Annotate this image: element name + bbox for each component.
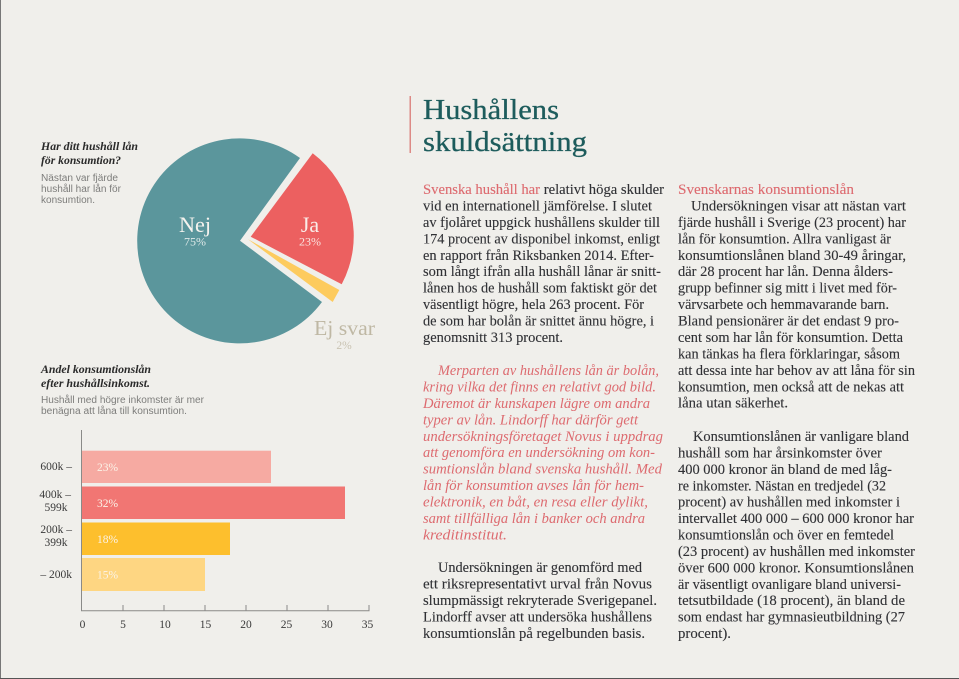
y axis labels: 400k – bbox=[39, 489, 71, 501]
y axis labels: 600k – bbox=[40, 461, 72, 473]
text block: income paragraph: som endast har gymnasieutbildning (27 bbox=[678, 610, 905, 626]
bar: 400k-599k 32% bbox=[82, 486, 345, 519]
text block: italic highlighted paragraph: elektronik, en båt, en resa eller dylikt, bbox=[423, 494, 648, 510]
x axis labels: 35 bbox=[362, 619, 374, 631]
heading: bar chart question: Andel konsumtionslån bbox=[40, 362, 151, 376]
text block: italic highlighted paragraph: Däremot är kunskapen lägre om andra bbox=[422, 396, 650, 412]
y axis labels: 599k bbox=[44, 502, 68, 514]
text block: income paragraph bbox=[678, 429, 915, 642]
text block: method paragraph: konsumtionslån på regelbunden basis. bbox=[423, 626, 645, 642]
text block: intro paragraph: 174 procent av disponibel inkomst, enligt bbox=[423, 231, 660, 247]
x axis labels: 20 bbox=[240, 619, 252, 631]
heading: bar chart question bbox=[40, 362, 151, 390]
x axis labels: 5 bbox=[120, 619, 126, 631]
text block: income paragraph: 400 000 kronor än bland de med låg- bbox=[678, 462, 892, 478]
bar: 400k-599k 32%: 32% bbox=[97, 498, 118, 510]
x axis labels: 15 bbox=[200, 619, 212, 631]
text block: method paragraph: Lindorff avser att undersöka hushållens bbox=[423, 609, 652, 625]
bar: 200k-399k 18%: 18% bbox=[97, 534, 118, 546]
text block: Svenskarnas konsumtionslån: Undersökningen visar att nästan vart bbox=[691, 198, 906, 214]
x axis labels: 0 bbox=[80, 619, 86, 631]
label: Ej svar: 2% bbox=[336, 340, 352, 352]
label: Ej svar: Ej svar bbox=[314, 316, 375, 340]
text block: italic highlighted paragraph: sumtionslån bland svenska hushåll. Med bbox=[423, 462, 663, 478]
text block: intro paragraph bbox=[423, 182, 664, 346]
text block: intro paragraph: genomsnitt 313 procent. bbox=[423, 330, 563, 346]
label: Nej: Nej bbox=[179, 212, 211, 237]
text block: italic highlighted paragraph bbox=[422, 363, 663, 543]
text block: income paragraph: procent) av hushållen med inkomster i bbox=[678, 495, 900, 511]
text block: Svenskarnas konsumtionslån: lån för konsumtion. Allra vanligast är bbox=[678, 231, 891, 247]
text block: Svenskarnas konsumtionslån: Svenskarnas konsumtionslån bbox=[678, 182, 855, 198]
text block: Svenskarnas konsumtionslån: fjärde hushåll i Sverige (23 procent) har bbox=[678, 215, 906, 231]
text block: Svenskarnas konsumtionslån: att dessa inte har behov av att låna för sin bbox=[678, 363, 916, 379]
x axis labels: 25 bbox=[281, 619, 292, 631]
label: Nej bbox=[179, 212, 211, 248]
title: Hushållens bbox=[423, 94, 559, 126]
axes bbox=[82, 430, 370, 611]
text block: Svenskarnas konsumtionslån: grupp befinner sig mitt i livet med för- bbox=[678, 281, 897, 297]
text block: income paragraph: (23 procent) av hushållen med inkomster bbox=[678, 544, 915, 560]
bar: under 200k 15%: 15% bbox=[97, 570, 118, 582]
text block: intro paragraph: som långt ifrån alla hushåll lånar är snitt- bbox=[423, 264, 661, 280]
x axis labels: 10 bbox=[159, 619, 171, 631]
pie chart bbox=[137, 138, 375, 352]
heading: pie chart question: Har ditt hushåll lån bbox=[40, 139, 138, 153]
text block: pie chart description: konsumtion. bbox=[41, 195, 95, 206]
text block: method paragraph: Undersökningen är genomförd med bbox=[438, 560, 643, 576]
text block: italic highlighted paragraph: kreditinstitut. bbox=[423, 527, 507, 543]
text block: Svenskarnas konsumtionslån: låna utan säkerhet. bbox=[678, 396, 788, 412]
text block: income paragraph: är väsentligt ovanligare bland universi- bbox=[678, 577, 901, 593]
x axis labels bbox=[80, 619, 374, 631]
text block: italic highlighted paragraph: typer av lån. Lindorff har därför gett bbox=[423, 412, 639, 428]
title bbox=[410, 94, 587, 158]
text block: italic highlighted paragraph: kring vilka det finns en relativt god bild. bbox=[423, 379, 656, 395]
text block: bar chart description: Hushåll med högre inkomster är mer bbox=[41, 394, 205, 406]
text block: Svenskarnas konsumtionslån bbox=[678, 182, 916, 412]
text block: Svenskarnas konsumtionslån: kan tänkas ha flera förklaringar, såsom bbox=[678, 346, 901, 362]
heading: pie chart question bbox=[40, 139, 138, 167]
text block: intro paragraph: av fjolåret uppgick hushållens skulder till bbox=[423, 215, 660, 231]
bar: 600k 23% bbox=[82, 451, 271, 483]
text block: bar chart description bbox=[41, 394, 205, 417]
text block: pie chart description: Nästan var fjärde bbox=[41, 173, 118, 184]
bar: 200k-399k 18% bbox=[82, 522, 230, 555]
bar: under 200k 15% bbox=[82, 558, 205, 591]
text block: italic highlighted paragraph: lån för konsumtion avses lån för hem- bbox=[423, 478, 644, 494]
text block: italic highlighted paragraph: att genomföra en undersökning om kon- bbox=[423, 445, 655, 461]
text block: income paragraph: konsumtionslån och över en femtedel bbox=[678, 528, 894, 544]
text block: Svenskarnas konsumtionslån: värvsarbete och hemmavarande barn. bbox=[678, 297, 889, 313]
label: Ja: 23% bbox=[299, 234, 321, 248]
text block: intro paragraph: väsentligt högre, hela 263 procent. För bbox=[423, 297, 644, 313]
text block: pie chart description bbox=[41, 173, 122, 206]
text block: income paragraph: tetsutbildade (18 procent), än bland de bbox=[678, 593, 905, 609]
x axis labels: 30 bbox=[321, 619, 333, 631]
text block: income paragraph: hushåll som har årsinkomster över bbox=[678, 445, 882, 461]
label: Ej svar bbox=[314, 316, 375, 352]
text block: income paragraph: re inkomster. Nästan en tredjedel (32 bbox=[678, 478, 886, 494]
title: skuldsättning bbox=[423, 126, 587, 158]
text block: intro paragraph: de som har bolån är snittet ännu högre, i bbox=[423, 314, 654, 330]
pie slice: Nej 75% bbox=[137, 138, 322, 343]
text block: intro paragraph: lånen hos de hushåll som faktiskt gör det bbox=[423, 281, 657, 297]
bar chart bbox=[39, 430, 374, 631]
text block: method paragraph: ett riksrepresentativt urval från Novus bbox=[423, 576, 652, 592]
pie slice: Ej svar 2% bbox=[248, 239, 339, 302]
heading: bar chart question: efter hushållsinkomst. bbox=[41, 376, 150, 390]
text block: pie chart description: hushåll har lån för bbox=[41, 183, 122, 195]
text block: method paragraph: slumpmässigt rekryterade Sverigepanel. bbox=[423, 593, 657, 609]
text block: income paragraph: intervallet 400 000 – 600 000 kronor har bbox=[678, 511, 914, 527]
heading: pie chart question: för konsumtion? bbox=[41, 153, 121, 167]
text block: bar chart description: benägna att låna till konsumtion. bbox=[41, 405, 187, 417]
text block: italic highlighted paragraph: Merparten av hushållens lån är bolån, bbox=[437, 363, 659, 379]
text block: italic highlighted paragraph: undersökningsföretaget Novus i uppdrag bbox=[423, 429, 663, 445]
text block: income paragraph: över 600 000 kronor. Konsumtionslånen bbox=[678, 560, 915, 576]
bar: 600k 23%: 23% bbox=[97, 462, 118, 474]
label: Ja: Ja bbox=[301, 212, 319, 237]
text block: intro paragraph: en rapport från Riksbanken 2014. Efter- bbox=[423, 248, 654, 264]
y axis labels: 399k bbox=[44, 537, 68, 549]
y axis labels: – 200k bbox=[39, 569, 72, 581]
text block: Svenskarnas konsumtionslån: konsumtion, men också att de nekas att bbox=[678, 379, 904, 395]
text block: italic highlighted paragraph: samt tillfälliga lån i banker och andra bbox=[423, 511, 645, 527]
label: Nej: 75% bbox=[184, 234, 206, 248]
text block: income paragraph: procent). bbox=[678, 626, 731, 642]
text block: Svenskarnas konsumtionslån: konsumtionslånen bland 30-49 åringar, bbox=[678, 248, 906, 264]
text block: Svenskarnas konsumtionslån: cent som har lån för konsumtion. Detta bbox=[678, 330, 904, 346]
label: Ja bbox=[299, 212, 321, 248]
y axis labels: 200k – bbox=[40, 524, 72, 536]
text block: intro paragraph: Svenska hushåll har relativt höga skulder bbox=[423, 182, 664, 198]
text block: method paragraph bbox=[423, 560, 657, 642]
pie slice: Ja 23% bbox=[251, 153, 354, 284]
text block: income paragraph: Konsumtionslånen är vanligare bland bbox=[693, 429, 910, 445]
y axis labels bbox=[39, 461, 72, 581]
text block: intro paragraph: vid en internationell jämförelse. I slutet bbox=[423, 198, 652, 214]
text block: Svenskarnas konsumtionslån: Bland pensionärer är det endast 9 pro- bbox=[678, 314, 899, 330]
text block: Svenskarnas konsumtionslån: där 28 procent har lån. Denna ålders- bbox=[678, 264, 893, 280]
